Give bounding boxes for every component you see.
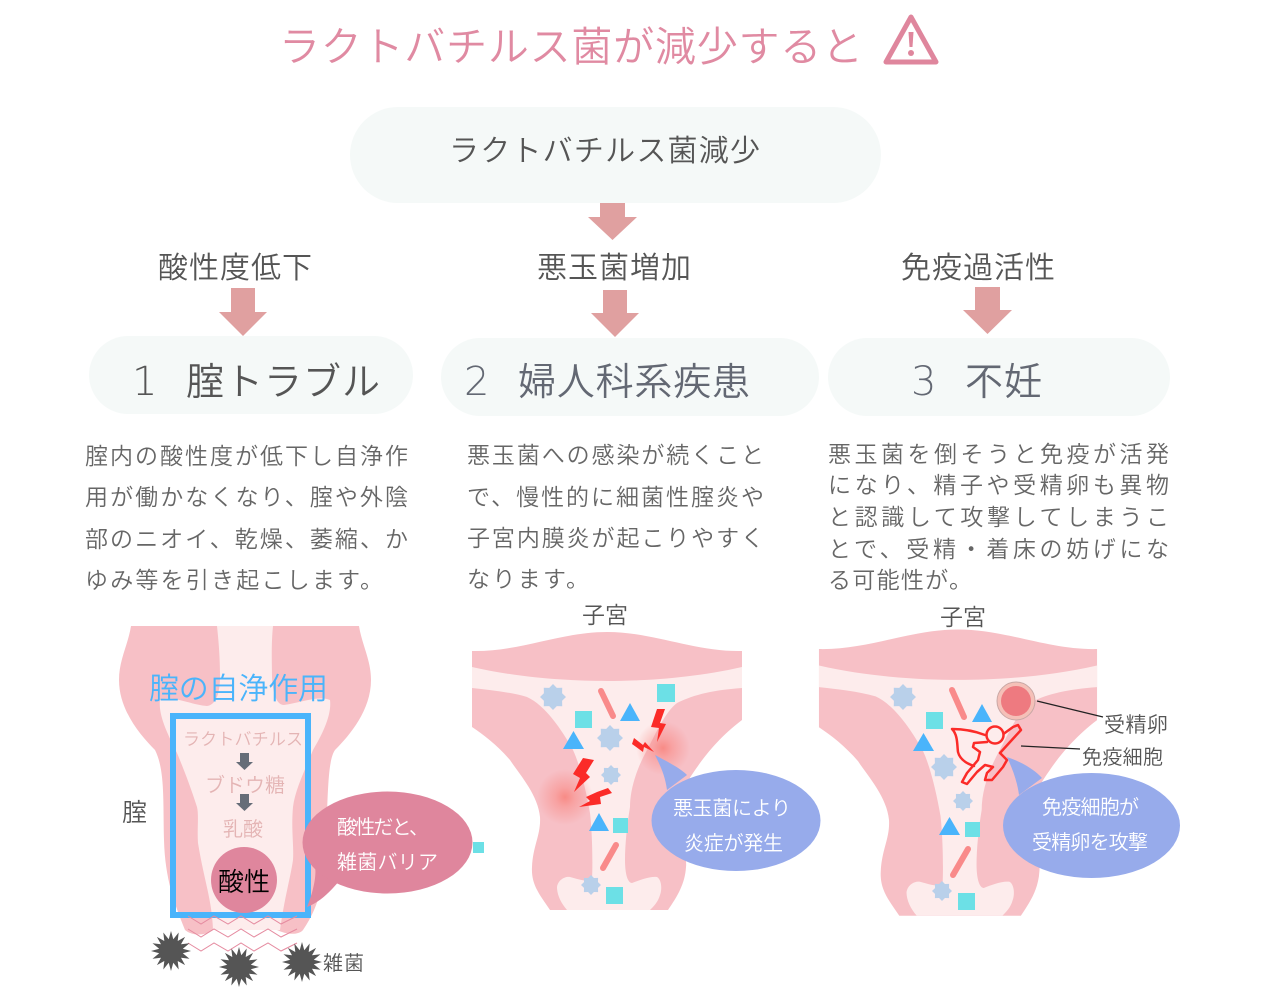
blue frame	[173, 716, 308, 915]
diagram: uterus with inflammation	[472, 632, 820, 910]
arrow: column 1	[219, 288, 267, 336]
panel heading 2	[441, 338, 819, 416]
text block: column 1: 部のニオイ、乾燥、萎縮、か	[85, 526, 408, 552]
flow: lactobacillus: ラクトバチルス	[183, 730, 303, 749]
icon: warning triangle	[886, 17, 936, 62]
arrow: column 2	[591, 290, 639, 337]
label: vagina: 腟	[122, 799, 147, 827]
callout: inflammation: 炎症が発生	[684, 832, 783, 855]
panel heading 1: 1	[132, 359, 157, 405]
label: bacteria: 雑菌	[323, 952, 364, 975]
text block: column 1: 腟内の酸性度が低下し自浄作	[85, 443, 408, 469]
arrow: flow 1	[236, 753, 253, 770]
panel heading 3	[828, 338, 1170, 416]
vagina shape	[119, 626, 371, 934]
top box: lactobacillus decrease	[350, 107, 881, 203]
panel heading 1: 腟トラブル	[186, 362, 380, 404]
text block: column 2: で、慢性的に細菌性腟炎や	[467, 484, 764, 510]
diagram: uterus with immune attack	[819, 629, 1180, 916]
icon: fertilized egg	[997, 682, 1035, 720]
callout: immune attack	[1003, 757, 1180, 878]
text block: column 3: とで、受精・着床の妨げにな	[828, 536, 1169, 562]
title: ラクトバチルス菌が減少すると	[279, 24, 863, 70]
flow: lactic acid: 乳酸	[223, 818, 263, 841]
text block: column 1	[85, 443, 408, 593]
bacteria shapes	[890, 684, 992, 910]
callout: acid barrier: 酸性だと、	[337, 816, 429, 839]
top box: lactobacillus decrease: ラクトバチルス菌減少	[449, 135, 760, 168]
uterus shape	[472, 632, 742, 910]
text block: column 3: 悪玉菌を倒そうと免疫が活発	[828, 441, 1169, 467]
panel heading 1	[89, 336, 413, 414]
text block: column 2: 子宮内膜炎が起こりやすく	[467, 525, 764, 551]
label: immune cell: 免疫細胞	[1082, 746, 1163, 769]
panel heading 3: 不妊	[965, 362, 1042, 404]
text block: column 1: ゆみ等を引き起こします。	[85, 567, 383, 593]
cause heading: immune overactivity: 免疫過活性	[901, 252, 1055, 285]
inflammation glow	[537, 721, 690, 825]
flow: glucose: ブドウ糖	[205, 774, 285, 797]
lightning bolts	[573, 709, 666, 807]
callout: inflammation: 悪玉菌により	[673, 797, 791, 820]
panel heading 2: 婦人科系疾患	[518, 362, 750, 404]
text block: column 3: と認識して攻撃してしまうこ	[828, 504, 1169, 530]
text block: column 3: になり、精子や受精卵も異物	[828, 472, 1169, 498]
callout: immune attack: 免疫細胞が	[1042, 796, 1139, 819]
bacteria bursts	[151, 931, 322, 987]
acidic circle	[211, 847, 277, 913]
text block: column 3	[828, 441, 1169, 593]
icon: immune cell superhero	[952, 725, 1021, 784]
label: uterus column 2: 子宮	[582, 602, 628, 628]
text block: column 2: なります。	[467, 566, 589, 592]
panel heading 3: 3	[911, 359, 936, 405]
callout: immune attack: 受精卵を攻撃	[1032, 831, 1148, 854]
callout: acid barrier: 雑菌バリア	[337, 851, 438, 874]
label: uterus column 3: 子宮	[940, 604, 986, 630]
acidic circle: 酸性	[218, 867, 270, 897]
cause heading: bad bacteria increase: 悪玉菌増加	[537, 252, 691, 285]
text block: column 2: 悪玉菌への感染が続くこと	[467, 442, 764, 468]
pointer line: immune cell	[1021, 746, 1080, 749]
stray bacterium square	[473, 842, 484, 853]
panel heading 2: 2	[464, 359, 489, 405]
text block: column 1: 用が働かなくなり、腟や外陰	[85, 484, 408, 510]
cause heading: acidity drop: 酸性度低下	[158, 252, 312, 285]
label: fertilized egg: 受精卵	[1104, 714, 1168, 737]
uterus shape	[819, 629, 1097, 916]
callout: acid barrier	[302, 792, 472, 907]
callout: inflammation	[652, 755, 820, 871]
zigzag barrier lines	[188, 916, 297, 951]
arrow: top	[588, 203, 637, 240]
pointer line: egg	[1037, 701, 1103, 717]
text block: column 2	[467, 442, 764, 592]
bacteria shapes	[540, 684, 675, 904]
diagram: vagina self-cleaning	[119, 626, 472, 987]
frame heading: 腟の自浄作用	[149, 673, 328, 706]
arrow: flow 2	[236, 794, 253, 811]
arrow: column 3	[963, 287, 1012, 334]
text block: column 3: る可能性が。	[828, 567, 972, 593]
